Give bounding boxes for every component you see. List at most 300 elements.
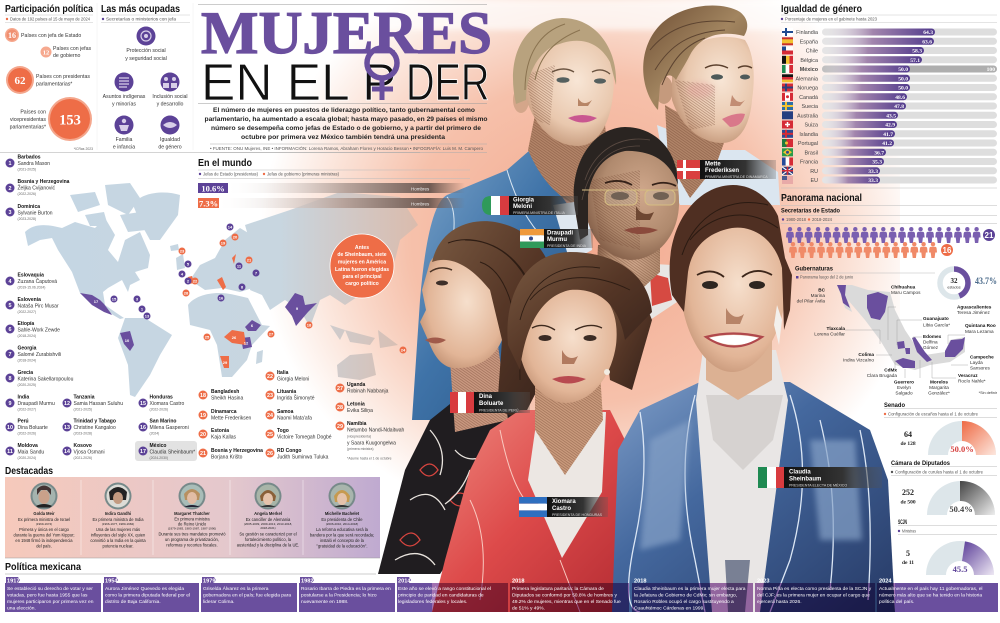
state labels: Edomex	[923, 334, 942, 339]
card: Golda Meir: Ex primera ministra de Israel	[18, 517, 70, 522]
title: MUJERES	[201, 0, 492, 67]
entry 29: Netumbo Nandi-Ndaitwah	[347, 428, 404, 434]
state labels: Colima	[858, 352, 874, 357]
credits line: • FUENTE: ONU Mujeres, INE • INFORMACIÓN: Lorena Ramos, Abraham Flores y Horacio Besson • INFOGRAFÍA: Luis M. M. Campero	[210, 146, 484, 151]
intro text	[204, 107, 488, 141]
white masks below the image	[376, 575, 1000, 623]
panel: igualdad de género: Porcentaje de mujeres en el gabinete hasta 2023	[785, 16, 878, 22]
timeline 2024: número más alto que se ha tenido en la historia	[879, 592, 982, 598]
bubble 153: *ICRas 2023	[74, 147, 93, 151]
state labels: CdMx	[884, 368, 897, 372]
row México: 100	[987, 67, 995, 73]
bubble 153	[10, 97, 93, 151]
map markers: 6	[251, 323, 254, 328]
entry 24: Naomi Mata'afa	[277, 416, 312, 422]
timeline 1982: 1982	[301, 578, 313, 584]
state labels: Layda	[970, 360, 983, 365]
entry 19: Mette Frederiksen	[211, 416, 252, 422]
state labels: Morelos	[930, 380, 948, 384]
name tag: Castro: Xiomara	[552, 499, 576, 505]
row España: España	[800, 39, 818, 45]
timeline 1979: gobernadora en el país; fue elegida para	[203, 592, 291, 598]
card: Michelle Bachelet	[310, 482, 374, 548]
bar: jefas de Estado 10.6%	[198, 183, 465, 194]
entry 19: 19	[200, 413, 206, 419]
name tag: Sheinbaum: Claudia	[789, 470, 811, 476]
bar: jefas de gobierno 7.3%: 7.3%	[199, 198, 218, 208]
icon: protección social: Protección social	[126, 48, 166, 54]
row Australia: Australia	[797, 113, 818, 119]
entry 7	[6, 346, 61, 362]
entry 7: Salomé Zurabishvili	[18, 352, 61, 358]
bubble 153: 153	[59, 112, 81, 128]
state labels: Gómez	[923, 345, 939, 350]
map markers: 9	[296, 306, 299, 311]
map markers: 2	[187, 278, 190, 284]
subheading: gubernaturas: Gubernaturas	[795, 266, 833, 272]
timeline 2018 CdMx: Cuauhtémoc Cárdenas en 1999.	[634, 606, 705, 612]
callout: Latin America	[330, 234, 394, 298]
state labels: Clara Brugada	[867, 373, 897, 378]
row Suecia	[782, 102, 997, 110]
state labels: Libia García*	[923, 322, 950, 328]
entry 28	[336, 402, 373, 414]
gauge: 50.4%	[949, 504, 973, 514]
entry 8: Katerina Sakellaropoulou	[18, 376, 74, 382]
bubble 153: parlamentarias*	[10, 124, 46, 130]
row Suecia: 47.8	[894, 104, 904, 110]
row RU	[782, 167, 997, 175]
gauge: 50.0%	[950, 444, 974, 454]
entry 12	[62, 394, 123, 412]
bar: jefas de Estado 10.6%: 10.6%	[201, 184, 225, 194]
entry 12: (2021-2025)	[74, 408, 92, 412]
row Suecia: Suecia	[802, 104, 818, 110]
heading: En el mundo	[198, 157, 252, 169]
timeline 2014	[397, 577, 508, 612]
map markers: 16	[219, 296, 224, 300]
row RU: RU	[810, 169, 818, 175]
callout: Latin America: Antes	[355, 245, 369, 251]
state labels: Indira Vizcaíno	[843, 358, 874, 362]
entry 12: 12	[64, 401, 70, 407]
entry 7: Georgia	[18, 346, 37, 352]
card: Michelle Bachelet: instaló el concepto de la	[320, 538, 365, 543]
bubble 62: Países con presidentas	[36, 74, 90, 80]
card: Margaret Thatcher: Margaret Thatcher	[174, 511, 210, 516]
card: Michelle Bachelet: Michelle Bachelet	[325, 511, 360, 516]
icon: familia: Familia	[116, 137, 132, 143]
timeline 1954	[103, 577, 199, 612]
timeline 1917: 1917	[7, 578, 19, 584]
timeline 1982: Rosario Ibarra de Piedra es la primera en	[301, 586, 391, 592]
entry 8	[6, 370, 74, 387]
entry 21	[198, 448, 263, 460]
heading: Participación política	[5, 3, 93, 15]
name tag: Frederiksen: PRIMERA MINISTRA DE DINAMARCA	[705, 175, 768, 179]
state labels: del Pilar Ávila	[797, 298, 825, 304]
timeline 2018: Diputados se conformó por 50.8% de hombres y	[512, 592, 617, 598]
timeline 2024: política del país.	[879, 599, 914, 605]
timeline 2018: de 51% y 49%.	[512, 606, 545, 612]
list: primeras ministras (orange)	[198, 370, 404, 460]
row RU: 33.3	[868, 169, 878, 175]
entry 27	[336, 382, 389, 394]
panel: participación política: Datos de 192 países al 15 de mayo de 2024	[10, 16, 91, 22]
entry 9	[6, 394, 55, 412]
heading: Panorama nacional	[781, 192, 862, 204]
entry 28: 28	[337, 405, 343, 411]
entry 3	[6, 204, 53, 221]
portrait: Boluarte	[378, 221, 560, 574]
legend: 2018-2024	[812, 217, 833, 222]
map markers: 5	[187, 262, 190, 266]
row Portugal: 41.2	[882, 141, 892, 147]
row Chile: Chile	[806, 48, 818, 54]
panel: política mexicana	[5, 561, 998, 612]
card: Angela Merkel	[237, 482, 299, 548]
state labels: Quintana Roo	[965, 323, 996, 328]
entry 20: Kaja Kallas	[211, 434, 237, 440]
pictogram: 21 secretarías	[786, 227, 995, 243]
map markers: 11	[237, 264, 242, 268]
entry 16: Milena Gasperoni	[150, 425, 189, 431]
entry 12: Samia Hassan Suluhu	[74, 401, 123, 407]
timeline 2018: 2018	[512, 578, 524, 584]
entry 7: (2018-2024)	[18, 358, 36, 362]
row Canadá: 48.6	[895, 95, 905, 101]
icon: female symbol	[367, 48, 397, 100]
entry 23: Ingrida Šimonytė	[277, 394, 315, 402]
entry 3: Dominica	[18, 204, 40, 210]
bar: jefas de gobierno 7.3%	[198, 198, 465, 208]
heading: Las más ocupadas	[101, 3, 180, 15]
card: Michelle Bachelet: (2006-2010, 2014-2018)	[326, 522, 358, 526]
row Islandia	[782, 130, 997, 138]
row Islandia: 41.7	[883, 132, 893, 138]
entry 13: Christine Kangaloo	[74, 425, 116, 431]
gauge: de 500	[900, 500, 916, 506]
name tag: Boluarte	[450, 392, 530, 413]
panel: senado	[884, 402, 997, 455]
legend: Panorama luego del 2 de junio	[800, 274, 854, 280]
card: Indira Gandhi: Indira Gandhi	[105, 511, 131, 516]
name tag: Sheinbaum	[758, 467, 882, 488]
gauge: 64	[904, 430, 912, 439]
name tag: Meloni	[482, 196, 578, 215]
entry 28: Evika Siliņa	[347, 408, 373, 414]
gauge	[900, 421, 996, 455]
row Suiza	[782, 120, 997, 128]
row Brasil	[782, 148, 997, 156]
card: Angela Merkel: fortalecimiento político, la	[245, 537, 292, 542]
entry 24	[266, 409, 312, 422]
map markers: 13	[145, 314, 150, 318]
name tag: Meloni: PRIMERA MINISTRA DE ITALIA	[513, 211, 565, 215]
entry 2: (2022-2026)	[18, 192, 36, 196]
card: Angela Merkel: austeridad y la disciplina de la UE.	[237, 542, 299, 548]
entry 4: Eslovaquia	[18, 272, 44, 278]
entry 15: Xiomara Castro	[150, 401, 184, 407]
heading: Igualdad de género	[781, 3, 862, 15]
panel: SCJN: SCJN	[898, 519, 907, 526]
bubble 12: de gobierno	[53, 53, 81, 59]
entry 26	[266, 448, 329, 460]
entry 6: Etiopía	[18, 321, 34, 327]
entry 18: Sheikh Hasina	[211, 396, 243, 402]
entry 5: Nataša Pirc Musar	[18, 304, 59, 310]
row Bélgica	[782, 56, 997, 64]
state labels: Tlaxcala	[826, 326, 845, 331]
icon: inclusión social: y desarrollo	[157, 102, 184, 108]
entry 26: Judith Suminwa Tuluka	[277, 454, 329, 460]
panel: cámara de diputados: Configuración de curules hasta el 1 de octubre	[895, 470, 984, 474]
intro text: El número de mujeres en puestos de liderazgo político, tanto gubernamental como	[213, 107, 475, 114]
entry 21: 21	[200, 451, 206, 457]
map markers: 14	[228, 224, 233, 230]
entry 19: Dinamarca	[211, 409, 237, 415]
row Australia: 43.5	[886, 113, 896, 119]
card: Angela Merkel: 2018-2021)	[260, 526, 276, 530]
entry 29: y Saara Kuugongelwa	[347, 440, 396, 446]
bubble 16	[5, 28, 81, 42]
timeline 2018: Primera legislatura paritaria: la Cámara de	[512, 586, 604, 592]
entry 5: (2022-2027)	[18, 310, 36, 314]
entry 13	[62, 418, 116, 436]
bubble 153: vicepresidentas	[10, 117, 46, 123]
icon: igualdad: Igualdad	[160, 137, 180, 143]
bubble 62: parlamentarias*	[36, 82, 72, 88]
intro text: octubre por primera vez México también tendrá una presidenta	[241, 134, 445, 141]
map markers: 15	[112, 296, 117, 302]
callout: Latin America: cargo político	[345, 281, 379, 287]
bar: jefas de gobierno 7.3%: Hombres	[411, 202, 430, 206]
name tag: Murmu: Murmu	[547, 237, 567, 243]
gauge: de 11	[902, 560, 914, 566]
row México: México	[800, 67, 819, 73]
timeline 1954: 1954	[105, 578, 118, 584]
state labels: Teresa Jiménez	[957, 310, 990, 315]
timeline 2023: Norma Piña es electa como presidenta de la SCJN y	[757, 586, 872, 592]
gauge	[902, 541, 994, 575]
panel: cámara de diputados	[891, 460, 997, 515]
bubble 153: Países con	[20, 110, 46, 116]
state labels: Sansores	[970, 366, 990, 370]
title	[198, 0, 492, 111]
row Chile	[782, 46, 997, 54]
timeline 2014: legisladores federales y locales.	[398, 599, 467, 605]
entry 20: Estonia	[211, 428, 229, 434]
name tag: Sheinbaum: Sheinbaum	[789, 476, 821, 482]
name tag: Castro	[519, 497, 608, 517]
bubble 16: 16	[8, 31, 16, 40]
bar: jefas de Estado 10.6%: Hombres	[411, 186, 430, 192]
state labels: Maru Campos	[891, 290, 921, 295]
row Canadá	[782, 93, 997, 101]
entry 25	[266, 428, 332, 440]
timeline 2014: Este año se elevó a rango constitucional el	[398, 586, 491, 592]
name tag: Boluarte: Boluarte	[479, 401, 504, 407]
bubble 12	[40, 46, 91, 59]
card: Golda Meir	[14, 482, 74, 548]
card: Golda Meir: del país.	[36, 544, 52, 548]
card: Michelle Bachelet: La reforma educativa será la	[316, 527, 369, 532]
heading: Política mexicana	[5, 561, 81, 573]
state labels: Guerrero	[894, 380, 914, 384]
row Portugal: Portugal	[798, 141, 818, 147]
entry 4	[6, 272, 57, 290]
entry 25: Togo	[277, 428, 289, 434]
card: Michelle Bachelet: "gratuidad de la educación".	[317, 544, 367, 548]
row Bélgica: Bélgica	[800, 58, 818, 64]
card: Angela Merkel: Su gestión se caracterizó por el	[239, 532, 297, 536]
entry 21: Bosnia y Herzegovina	[211, 448, 263, 454]
row Alemania	[782, 74, 997, 82]
entry 23: Lituania	[277, 389, 296, 395]
timeline 1979: liderar Colima.	[203, 599, 235, 605]
name tag: Frederiksen	[677, 160, 776, 179]
entry 24: Samoa	[277, 409, 294, 415]
timeline 1917: Se estableció su derecho de votar y ser	[7, 586, 93, 592]
entry 17: 17	[140, 449, 146, 455]
legend: Jefas de Estado (presidentas)	[203, 172, 259, 176]
bubble 12: 12	[43, 50, 49, 56]
row Canadá: Canadá	[799, 95, 818, 101]
row Finlandia: 64.3	[923, 30, 933, 36]
icon: inclusión social: Inclusión social	[152, 94, 188, 100]
entry 1	[6, 154, 50, 172]
name tag: Murmu: Draupadi	[547, 230, 573, 236]
timeline 2018: 49.2% de mujeres, mientras que en el Senado fue	[512, 599, 621, 605]
name tag: Boluarte: PRESIDENTA DE PERÚ	[479, 408, 519, 412]
map markers: 4	[181, 272, 184, 276]
entry 13: Trinidad y Tabago	[74, 418, 116, 424]
map markers: 20	[233, 234, 238, 240]
entry 14: Kosovo	[74, 443, 92, 449]
entry 29: (primera ministra)	[347, 447, 374, 451]
card: Margaret Thatcher: Ex primera ministra	[174, 516, 210, 522]
entry 21: Borjana Krišto	[211, 454, 243, 460]
entry 6: (2018-2024)	[18, 334, 36, 338]
entry 9: 9	[8, 401, 12, 407]
entry 14: (2021-2026)	[74, 456, 92, 460]
timeline 1917: votadas, pero fue hasta 1955 que las	[7, 592, 88, 598]
entry 16: (2024)	[150, 432, 159, 436]
timeline 2024	[877, 578, 998, 612]
row España: 63.6	[922, 39, 932, 45]
gauge	[900, 481, 995, 515]
timeline 1954: distrito de Baja California.	[105, 599, 161, 605]
entry 7: 7	[8, 352, 12, 358]
entry 18: Bangladesh	[211, 389, 239, 395]
donut: 32 estados: 43.7%	[975, 276, 997, 286]
panel: en el mundo	[198, 157, 470, 208]
timeline 2024: Actualmente en el país hay 11 gobernadoras, el	[879, 586, 982, 592]
entry 3: Sylvanie Burton	[18, 210, 53, 216]
card: Golda Meir: Golda Meir	[33, 511, 55, 516]
entry 18: 18	[200, 393, 206, 399]
state labels: Delfina	[923, 340, 938, 344]
entry 3: 3	[8, 210, 12, 216]
timeline 1979: Griselda Álvarez es la primera	[203, 585, 269, 592]
row Finlandia	[782, 28, 997, 36]
row Brasil: Brasil	[805, 150, 818, 156]
entry 1: Sandra Mason	[18, 161, 50, 167]
map markers: 7	[255, 270, 258, 276]
entry 13: 13	[64, 425, 70, 431]
row Alemania: Alemania	[796, 76, 818, 82]
legend	[199, 172, 340, 176]
map markers: 3	[136, 296, 139, 302]
icon: asuntos indígenas: Asuntos indígenas	[103, 94, 146, 100]
panel: destacadas	[5, 465, 380, 558]
entry 2: Bosnia y Herzegovina	[18, 179, 70, 185]
map markers: 1	[141, 306, 144, 312]
panel: senado: Configuración de escaños hasta el 1 de octubre	[888, 412, 979, 416]
panel: igualdad de género	[781, 3, 997, 184]
entry 27: 27	[337, 386, 343, 392]
card: Michelle Bachelet: bandera por la que será recordada;	[310, 532, 374, 538]
row Francia	[782, 158, 997, 166]
card: Margaret Thatcher: (1979-1983, 1983-1987, 1987-1990)	[168, 526, 216, 530]
card: Golda Meir: durante la guerra del Yom Kippur;	[14, 532, 74, 538]
name tag: Meloni: Meloni	[513, 204, 532, 210]
row España	[782, 37, 997, 45]
icon: igualdad	[158, 116, 182, 150]
entry 15	[138, 394, 184, 412]
state labels: Lorena Cuéllar	[814, 332, 845, 336]
state labels: Campeche	[970, 354, 994, 360]
map markers: 27	[269, 332, 274, 336]
state labels: González*	[928, 390, 950, 396]
entry 10: Perú	[18, 418, 29, 424]
timeline 1954: Aurora Jiménez Quevedo es elegida	[105, 586, 184, 592]
entry 12: Tanzania	[74, 394, 95, 400]
title: DER	[406, 53, 489, 111]
name tag: Frederiksen: Mette	[705, 162, 721, 168]
panel: cámara de diputados: Cámara de Diputados	[891, 460, 950, 467]
intro text: parlamentario, ha aumentado a escala global; hasta mayo pasado, en 29 países el mismo	[204, 116, 488, 123]
entry 11: Moldova	[18, 443, 38, 449]
row Francia: 35.3	[872, 160, 882, 166]
row Bélgica: 57.1	[910, 58, 920, 64]
entry 8: Grecia	[18, 370, 33, 376]
card: Golda Meir: en 1948 firmó la independencia	[15, 538, 73, 543]
donut: 32 estados: estados	[947, 286, 961, 290]
card: Golda Meir: (1969-1974)	[36, 522, 52, 526]
gauge: de 128	[900, 441, 916, 447]
donut: 32 estados	[940, 269, 997, 297]
entry 5: Eslovenia	[18, 297, 41, 303]
callout: Latin America: para el principal	[342, 274, 382, 280]
icon: asuntos indígenas: y minorías	[112, 102, 136, 108]
entry 22	[266, 370, 309, 382]
card: Indira Gandhi: (1966-1977, 1980-1984)	[102, 522, 134, 526]
row Francia: Francia	[800, 160, 818, 166]
icon: inclusión social	[152, 72, 188, 108]
state labels	[797, 284, 998, 396]
panel: panorama nacional	[781, 188, 998, 396]
name tag: Sheinbaum: PRESIDENTA ELECTA DE MÉXICO	[789, 482, 847, 488]
callout: Latin America: de Sheinbaum, siete	[337, 252, 387, 258]
map markers: 8	[241, 284, 244, 290]
card: Michelle Bachelet: Ex presidenta de Chile	[321, 517, 363, 522]
world map	[25, 183, 418, 397]
timeline 2018 CdMx: la Jefatura de Gobierno de CdMx; sin embargo,	[634, 592, 737, 598]
timeline 2014: 2014	[398, 578, 411, 584]
entry 14: Vjosa Osmani	[74, 450, 105, 456]
entry 29	[336, 421, 404, 460]
